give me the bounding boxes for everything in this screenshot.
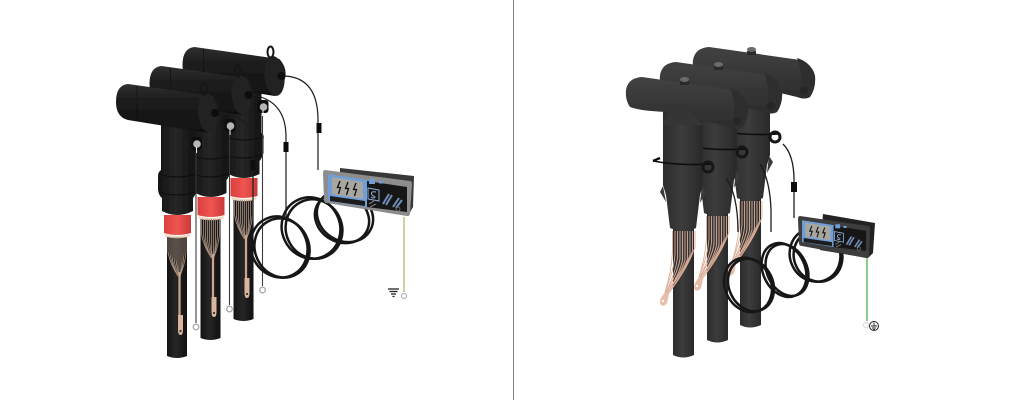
icon: protective earth symbol [870,322,878,330]
earth wire [866,258,868,321]
earth lug [402,294,406,298]
termination: rear phase [182,46,287,321]
termination: front phase [116,84,220,358]
rogowski coil rings [241,180,383,287]
termination: rear phase [693,47,815,328]
termination: front phase [626,77,748,358]
icon: functional earth symbol [388,289,399,296]
earth lug [864,322,868,328]
termination: middle phase [660,62,782,342]
monitoring device [323,168,414,216]
divider between panels [513,0,514,400]
panel: right assembly with grey sleeves [626,47,878,358]
termination: middle phase [150,66,254,340]
rogowski coil rings [715,220,851,320]
sensor cables and inline connectors [219,76,322,232]
monitoring device [798,214,875,258]
sensor cable and inline connector [726,144,797,232]
earth wire [403,217,405,292]
panel: left assembly with red sleeves [116,46,414,358]
